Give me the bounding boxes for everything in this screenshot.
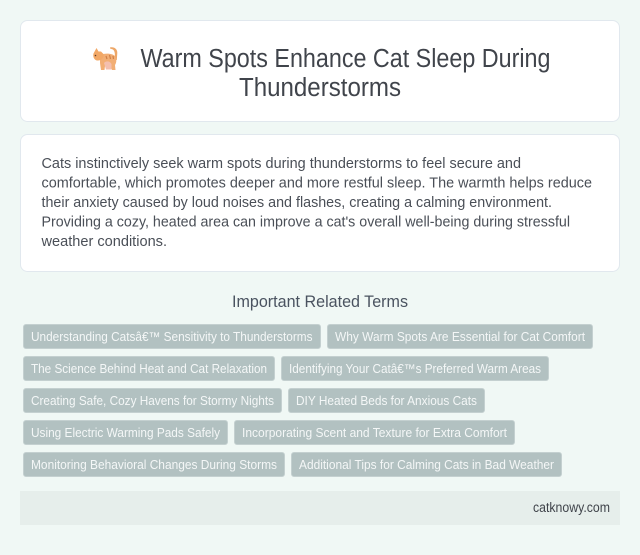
- tag: Additional Tips for Calming Cats in Bad Weather: [299, 458, 554, 472]
- tag: [24, 452, 284, 476]
- icon: cat: [93, 47, 117, 70]
- tag: Identifying Your Catâ€™s Preferred Warm Areas: [289, 362, 541, 376]
- tag: [24, 420, 228, 444]
- text block: description: weather conditions.: [41, 234, 167, 250]
- tag: Monitoring Behavioral Changes During Storms: [31, 458, 277, 472]
- tag: [24, 356, 274, 380]
- text block: description: comfortable, which promotes deeper and more restful sleep. The warmth helps reduce: [42, 176, 592, 192]
- heading: related terms: Important Related Terms: [232, 293, 408, 311]
- text block: description: Cats instinctively seek warm spots during thunderstorms to feel secure and: [42, 156, 521, 172]
- tag group: related terms: [24, 324, 592, 476]
- tag: [234, 420, 514, 444]
- tag: Using Electric Warming Pads Safely: [31, 426, 221, 440]
- text block: description: [41, 156, 592, 250]
- text block: description: their anxiety caused by loud noises and flashes, creating a calming environment.: [42, 195, 552, 211]
- title: Warm Spots Enhance Cat Sleep During: [140, 45, 550, 73]
- tag: [24, 388, 282, 412]
- tag: Incorporating Scent and Texture for Extra Comfort: [242, 426, 507, 440]
- title: Thunderstorms: [239, 74, 401, 102]
- footer: catknowy.com: [533, 500, 610, 515]
- tag: [24, 324, 320, 348]
- tag: Why Warm Spots Are Essential for Cat Comfort: [335, 330, 586, 344]
- tag: Creating Safe, Cozy Havens for Stormy Nights: [31, 394, 274, 408]
- tag: The Science Behind Heat and Cat Relaxation: [31, 362, 267, 376]
- tag: Understanding Catsâ€™ Sensitivity to Thunderstorms: [31, 330, 312, 344]
- tag: [288, 388, 484, 412]
- tag: [282, 356, 548, 380]
- footer: [20, 491, 620, 525]
- title: [140, 45, 550, 102]
- text block: description: Providing a cozy, heated area can improve a cat's overall well-being during stressful: [42, 214, 570, 230]
- tag: [292, 452, 562, 476]
- panel: description card: [20, 134, 620, 272]
- tag: [328, 324, 592, 348]
- tag: DIY Heated Beds for Anxious Cats: [296, 394, 477, 408]
- panel: title card: [20, 20, 620, 122]
